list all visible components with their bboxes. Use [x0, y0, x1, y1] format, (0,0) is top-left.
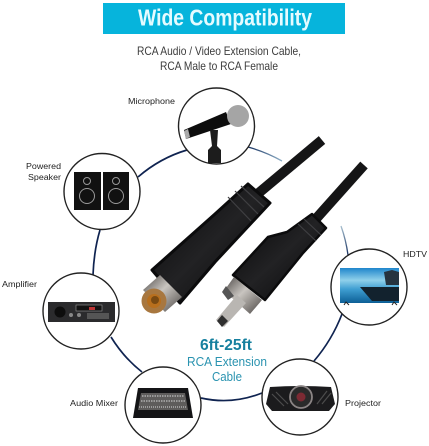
male RCA plug	[216, 165, 364, 327]
cable length label: Cable	[212, 370, 242, 384]
title banner: Wide Compatibility	[138, 4, 312, 30]
device: HDTV	[331, 249, 407, 325]
device labels: HDTV	[403, 249, 427, 259]
subtitle: RCA Audio / Video Extension Cable,	[137, 44, 301, 58]
device: microphone	[178, 88, 254, 164]
device labels: Speaker	[28, 172, 61, 182]
cable length label	[187, 337, 267, 384]
device labels	[2, 96, 427, 408]
subtitle	[137, 44, 301, 73]
device: powered speakers	[64, 154, 140, 230]
cable length label: RCA Extension	[187, 355, 267, 369]
female RCA cable	[142, 140, 322, 314]
device: projector	[262, 359, 338, 435]
device labels: Audio Mixer	[70, 398, 118, 408]
device labels: Microphone	[128, 96, 175, 106]
device labels: Amplifier	[2, 279, 37, 289]
connecting ring arcs	[93, 147, 348, 401]
cable length label: 6ft-25ft	[200, 337, 252, 354]
device: audio mixer	[125, 367, 201, 443]
subtitle: RCA Male to RCA Female	[160, 59, 278, 73]
device: amplifier	[43, 273, 119, 349]
device labels: Powered	[26, 161, 61, 171]
device labels: Projector	[345, 398, 381, 408]
